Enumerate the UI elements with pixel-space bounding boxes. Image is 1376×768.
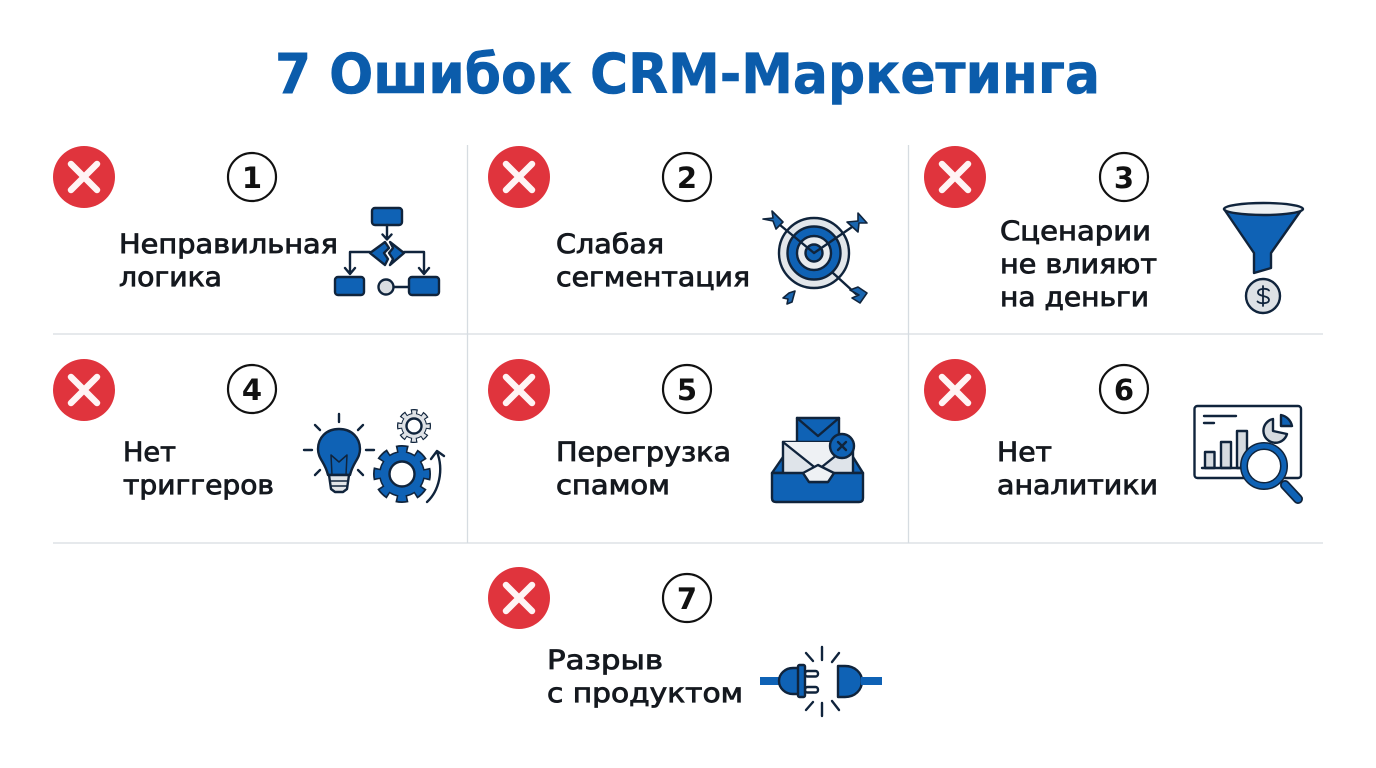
- text: weak segmentation: [556, 229, 750, 293]
- text: no analytics: [997, 437, 1158, 501]
- text: scenarios do not affect money: не влияют: [1000, 249, 1157, 280]
- text: spam overload: Перегрузка: [556, 437, 731, 468]
- icon: inbox tray with envelopes: [772, 418, 863, 502]
- number 6: [1100, 365, 1148, 413]
- text: wrong logic: [119, 229, 338, 293]
- text: spam overload: [556, 437, 731, 501]
- number 2: [663, 153, 711, 201]
- icon: dashboard with magnifier: [1194, 406, 1301, 499]
- error badge 1: [53, 146, 115, 208]
- panel: mistake 3: [924, 146, 1303, 313]
- text: disconnect from product: [547, 645, 743, 709]
- text: disconnect from product: Разрыв: [547, 645, 663, 676]
- error badge 5: [488, 359, 550, 421]
- number 6: 6: [1114, 373, 1134, 407]
- title: 7 Ошибок CRM-Маркетинга: [275, 42, 1100, 106]
- icon: unplugged connector: [760, 647, 882, 716]
- number 7: 7: [677, 582, 697, 616]
- error badge 7: [488, 567, 550, 629]
- panel: mistake 7: [488, 567, 882, 716]
- number 4: 4: [242, 373, 262, 407]
- number 1: [228, 153, 276, 201]
- text: no triggers: [123, 437, 274, 501]
- number 5: 5: [677, 373, 697, 407]
- text: scenarios do not affect money: Сценарии: [1000, 216, 1151, 247]
- error badge 2: [488, 146, 550, 208]
- icon: target with arrows: [763, 211, 867, 304]
- number 4: [228, 365, 276, 413]
- number 2: 2: [677, 161, 697, 195]
- icon: funnel and coin: [1224, 203, 1303, 313]
- text: disconnect from product: с продуктом: [547, 678, 743, 709]
- text: wrong logic: Неправильная: [119, 229, 338, 260]
- number 3: [1100, 153, 1148, 201]
- error badge 6: [924, 359, 986, 421]
- error badge 3: [924, 146, 986, 208]
- text: no triggers: Нет: [123, 437, 176, 468]
- text: weak segmentation: сегментация: [556, 262, 750, 293]
- text: no triggers: триггеров: [123, 470, 274, 501]
- panel: mistake 1: [53, 146, 439, 295]
- panel: mistake 2: [488, 146, 867, 304]
- text: scenarios do not affect money: на деньги: [1000, 282, 1149, 313]
- number 1: 1: [242, 161, 262, 195]
- text: no analytics: Нет: [997, 437, 1052, 468]
- icon: light bulb and gears: [304, 412, 444, 502]
- text: weak segmentation: Слабая: [556, 229, 664, 260]
- number 3: 3: [1114, 161, 1134, 195]
- text: spam overload: спамом: [556, 470, 670, 501]
- icon: broken flowchart: [335, 208, 439, 295]
- error badge 4: [53, 359, 115, 421]
- panel: mistake 4: [53, 359, 444, 502]
- panel: mistake 6: [924, 359, 1301, 501]
- panel: mistake 5: [488, 359, 863, 502]
- text: wrong logic: логика: [119, 262, 222, 293]
- text: no analytics: аналитики: [997, 470, 1158, 501]
- number 7: [663, 574, 711, 622]
- text: scenarios do not affect money: [1000, 216, 1157, 313]
- number 5: [663, 365, 711, 413]
